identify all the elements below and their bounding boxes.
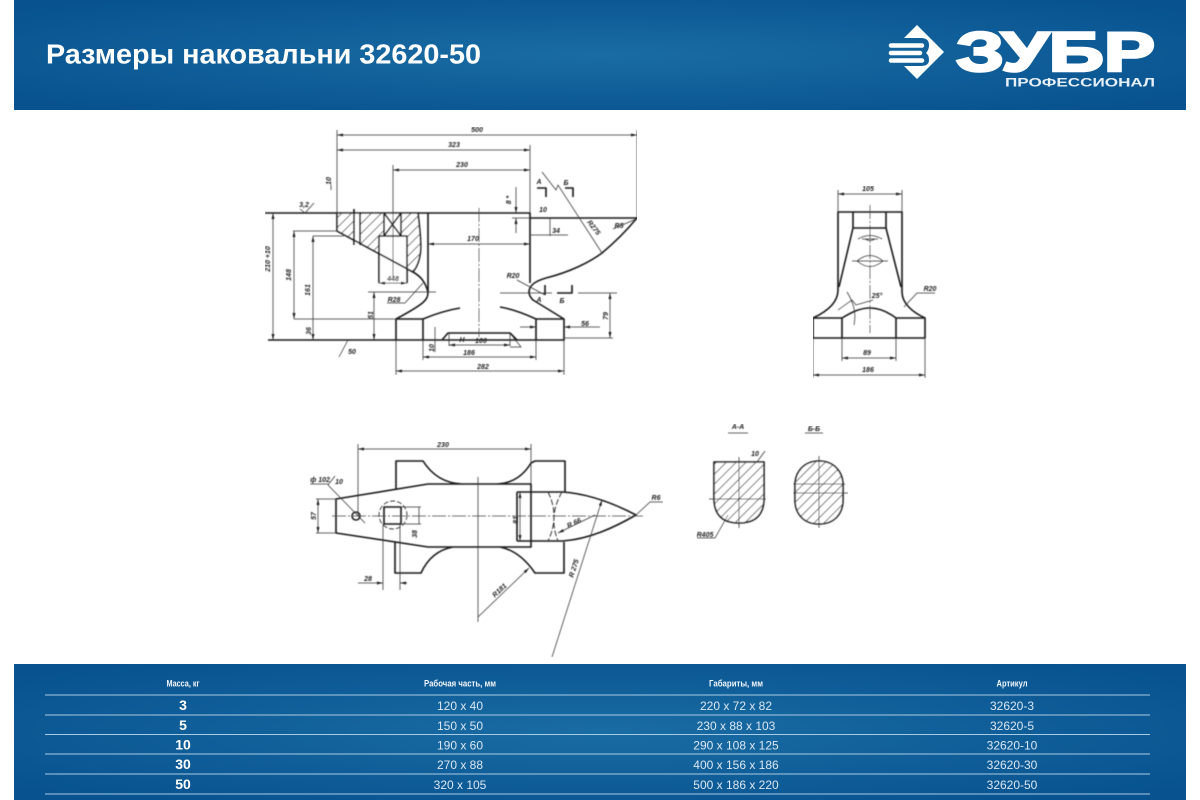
table row: 50 kg: 500 x 186 x 220 [693,778,779,792]
top view labels: R181 [491,583,509,599]
dimension labels [265,127,624,371]
table row: 3 kg: 120 x 40 [437,699,483,713]
end view center line [869,205,871,333]
dimension labels: 36 [306,327,313,335]
dimension labels: Б [560,298,565,305]
table row: 50 kg: 320 x 105 [434,778,487,792]
section marks А Б [537,188,573,295]
drawing: section А-А [697,424,766,539]
top view hole [352,501,407,529]
dimension labels: 8 * [506,195,513,204]
table header row: Рабочая часть, мм [424,678,496,688]
drawing: end view of anvil [813,186,937,378]
table row: 3 kg: 3 [179,697,187,713]
top view labels: 57 [311,511,318,520]
table header row: Габариты, мм [709,678,763,688]
center line [478,208,480,337]
top view labels: R 275 [568,558,581,579]
dimension labels: Н [459,337,465,344]
dimension labels: 79 [603,312,610,320]
horn dashed arcs [548,492,562,541]
table row: 10 kg: 10 [175,736,191,752]
top view dimensions [310,444,663,657]
end view labels: 89 [863,350,871,357]
end view labels: 105 [862,186,874,193]
drawing: side view of anvil [265,127,637,375]
dimension labels: 10 [326,177,333,185]
drawing: section Б-Б [793,426,848,528]
dimension labels: 10 [539,207,547,214]
drawing: top view of anvil [310,442,663,657]
dimension labels: R20 [507,273,520,280]
top view center lines [332,477,643,622]
icon: logo diamond with stripes [891,25,944,79]
table header row [166,678,1028,688]
end view outline [813,212,925,338]
dimension labels: 100 [475,338,487,345]
top view labels: ф 102 [310,477,330,484]
dimension labels: 161 [305,284,312,296]
dimension labels: 50 [348,349,356,356]
table header row: Артикул [996,678,1028,688]
anvil outline [265,213,637,340]
table row: 50 kg: 50 [175,776,191,792]
end view lenses [852,236,888,266]
dimension lines [273,135,637,371]
section Б-Б axes [793,456,848,528]
top view labels: 38 [412,530,419,538]
table row: 50 kg: 32620-50 [987,778,1038,792]
end view dimensions [813,190,935,378]
top view labels: 81 [513,516,520,524]
dimension labels: R28 [388,297,401,304]
table row: 3 kg [179,697,1034,713]
table row: 5 kg: 230 x 88 x 103 [697,719,776,733]
hatched section [337,213,421,272]
section А-А axes and leaders [697,451,766,538]
dimension labels: А [535,297,542,304]
top view labels: 230 [436,442,449,449]
end view labels [862,186,937,374]
logo: ЗУБР Профессионал [891,20,1155,90]
dimension labels: R275 [585,219,601,237]
dimension labels: 282 [476,364,489,371]
dimension labels: 323 [448,142,460,149]
dimension labels: 3,2 [299,202,309,209]
dimension labels: 56 [581,321,589,328]
table row: 30 kg: 270 x 88 [437,758,483,772]
top view labels: 10 [335,479,343,486]
section А-А labels: А-А [731,424,744,431]
table row: 30 kg: 32620-30 [987,758,1038,772]
table rules [45,695,1150,794]
table panel [14,664,1186,800]
table row: 5 kg [179,717,1034,733]
dimension labels: R5 [615,223,624,230]
dimension labels: 148 [286,269,293,281]
logo tagline: ПРОФЕССИОНАЛ [1005,76,1155,90]
top view labels: R6 [652,495,661,502]
dimension labels: Б [564,180,569,187]
table row: 5 kg: 5 [179,717,187,733]
table row: 3 kg: 32620-3 [990,699,1034,713]
top view labels: R 66 [566,517,583,530]
table row: 30 kg: 400 x 156 x 186 [693,758,779,772]
table header row: Масса, кг [166,678,200,688]
top view outline [336,461,636,573]
title: Размеры наковальни 32620-50 [46,38,481,70]
top view labels: 28 [363,576,372,583]
table row: 10 kg [175,736,1038,752]
table row: 30 kg: 30 [175,756,191,772]
section А-А labels [697,424,759,539]
section Б-Б label: Б-Б [808,426,820,433]
section А-А shape [714,462,764,523]
table row: 5 kg: 150 x 50 [437,719,483,733]
dimension labels: 186 [463,350,475,357]
header band [14,0,1186,110]
dimension labels: 500 [471,127,483,134]
section А-А labels: R405 [697,532,713,539]
table row: 10 kg: 32620-10 [987,738,1038,752]
dimension labels: 10 [429,344,436,352]
table row: 30 kg [175,756,1038,772]
table row: 5 kg: 32620-5 [990,719,1034,733]
dimension labels: 34 [552,228,560,235]
dimension labels: 170 [467,236,479,243]
table row: 10 kg: 290 x 108 x 125 [693,738,779,752]
extension and leader lines [293,130,637,375]
dimension labels: 448 [386,276,399,283]
end view labels: 25° [871,292,882,300]
section Б-Б shape [795,461,843,524]
logo wordmark: ЗУБР [956,20,1155,83]
top view labels [310,442,661,599]
section А-А labels: 10 [751,451,759,458]
table row: 50 kg [175,776,1038,792]
end view labels: 186 [862,367,874,374]
dimension labels: 230 [455,162,468,169]
dimension labels: 51 [368,311,375,319]
end view labels: R20 [924,286,937,293]
dimension labels: А [535,179,542,186]
dimension labels: 210 +10 [265,246,272,273]
table row: 3 kg: 220 x 72 x 82 [700,699,772,713]
table row: 10 kg: 190 x 60 [437,738,483,752]
